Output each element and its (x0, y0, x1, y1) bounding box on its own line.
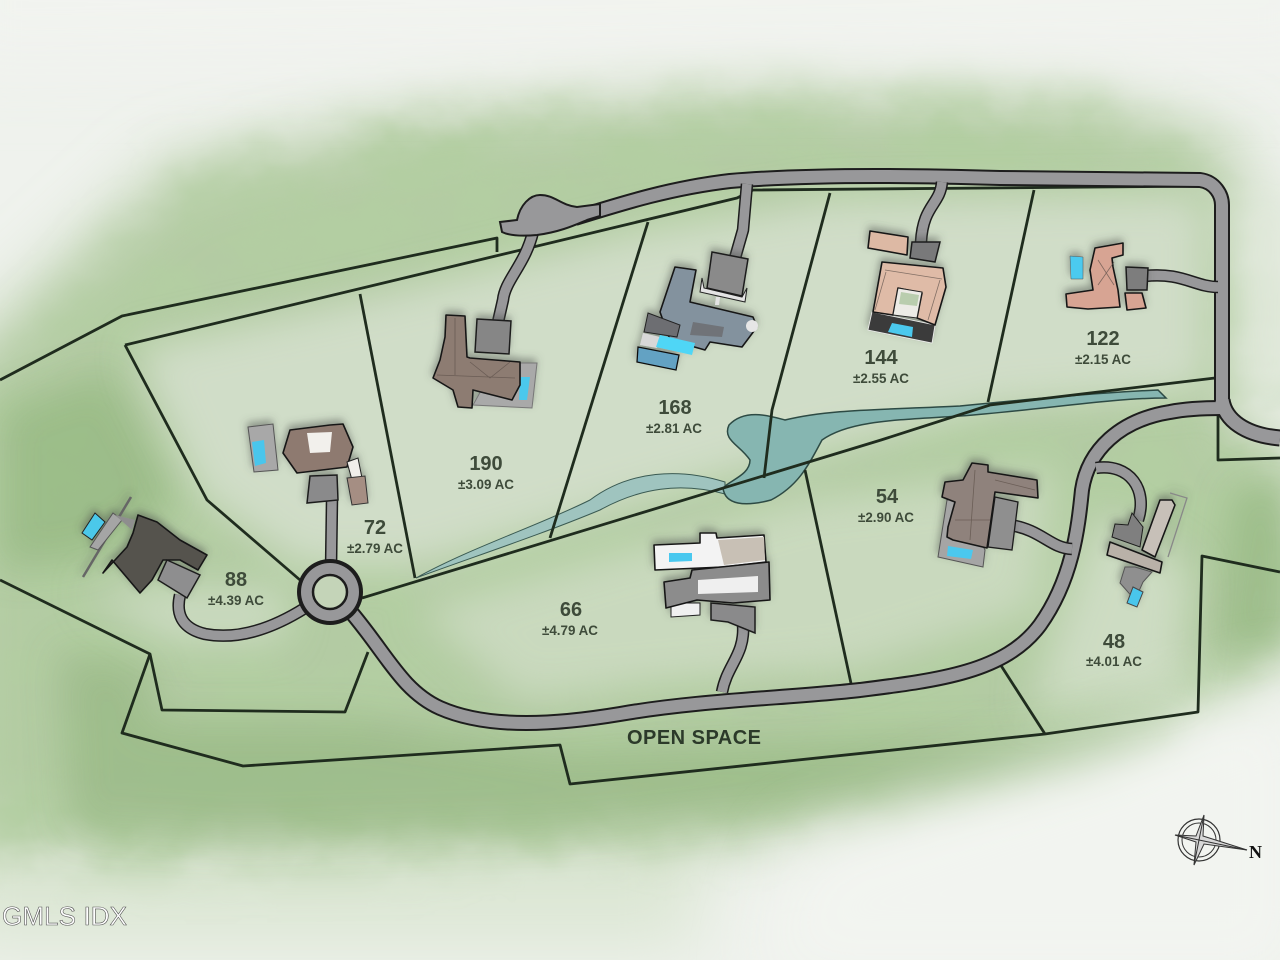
house: lot 66 (654, 533, 770, 633)
lot label 190: ±3.09 AC (458, 477, 514, 492)
road network (179, 176, 1280, 723)
lot label 168: ±2.81 AC (646, 421, 702, 436)
house: lot 190 (433, 315, 537, 408)
lot label 144: 144 (864, 347, 899, 369)
lot label 88: 88 (225, 569, 247, 591)
house: lot 48 (1107, 493, 1187, 607)
house: lot 168 (637, 252, 758, 370)
house: lot 122 (1066, 243, 1148, 310)
lot label 168: 168 (658, 397, 692, 419)
lot label 66: 66 (560, 599, 582, 621)
house: lot 72 (248, 424, 368, 505)
lot boundary lines (0, 186, 1280, 784)
icon: north compass (1175, 815, 1247, 865)
lot label 72: ±2.79 AC (347, 541, 403, 556)
lot label 54: 54 (876, 486, 899, 508)
lot label 66 (542, 599, 598, 638)
lot label 122: 122 (1086, 328, 1120, 350)
lot label 122: ±2.15 AC (1075, 352, 1131, 367)
lot label 72: 72 (364, 517, 386, 539)
open space label: OPEN SPACE (627, 727, 761, 749)
creek and pond (416, 390, 1166, 578)
lot label 144: ±2.55 AC (853, 371, 909, 386)
lot label 88: ±4.39 AC (208, 593, 264, 608)
lot label 168 (646, 397, 702, 436)
lot label 48: ±4.01 AC (1086, 654, 1142, 669)
roundabout (297, 559, 363, 625)
lot label 66: ±4.79 AC (542, 623, 598, 638)
watermark: GMLS IDX (2, 901, 127, 931)
lot label 54 (858, 486, 914, 525)
driveways (179, 182, 1218, 692)
lot label 48 (1086, 631, 1142, 669)
lot label 72 (347, 517, 403, 556)
lot label 190 (458, 453, 514, 492)
lot label 190: 190 (469, 453, 503, 475)
lot label 54: ±2.90 AC (858, 510, 914, 525)
lot label 48: 48 (1103, 631, 1125, 653)
house: lot 54 (938, 463, 1038, 567)
house: lot 144 (868, 231, 946, 343)
house: lot 88 (82, 497, 207, 598)
lot label 88 (208, 569, 264, 608)
cul-de-sac (500, 195, 600, 236)
north label: N (1249, 842, 1262, 862)
lot label 122 (1075, 328, 1131, 367)
lot label 144 (853, 347, 909, 386)
